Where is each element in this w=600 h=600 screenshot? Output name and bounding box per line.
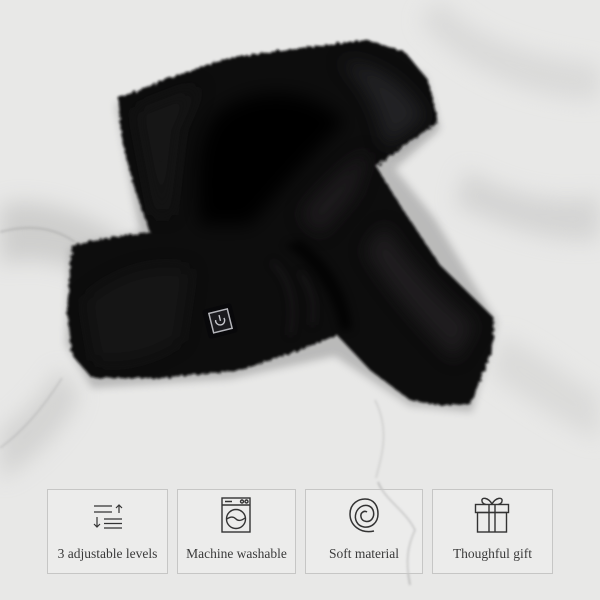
icon: levels (94, 505, 122, 528)
label: Thoughful gift (453, 546, 532, 561)
fur highlight, left end (85, 267, 190, 362)
scarf shadow (66, 46, 497, 412)
icon: spiral (350, 499, 378, 532)
crossing shadow (285, 240, 352, 330)
icon: gift box (476, 498, 508, 532)
fur highlight, lower right band (365, 225, 475, 360)
icon: washing machine (222, 498, 250, 532)
power button (202, 303, 238, 339)
feature card: soft material (306, 490, 422, 574)
label: Machine washable (186, 546, 287, 561)
gather folds (272, 262, 314, 335)
fur highlight, upper band (340, 60, 425, 148)
fur highlight, crossing band (300, 150, 370, 235)
label: 3 adjustable levels (58, 546, 157, 561)
feature card: thoughtful gift (432, 490, 552, 574)
feature card: 3 adjustable levels (48, 490, 168, 574)
label: Soft material (329, 546, 399, 561)
scarf (66, 40, 497, 412)
scarf silhouette (67, 40, 494, 405)
fur highlight, left band (135, 85, 200, 215)
inner loop shadow (197, 93, 345, 225)
feature card: machine washable (178, 490, 296, 574)
